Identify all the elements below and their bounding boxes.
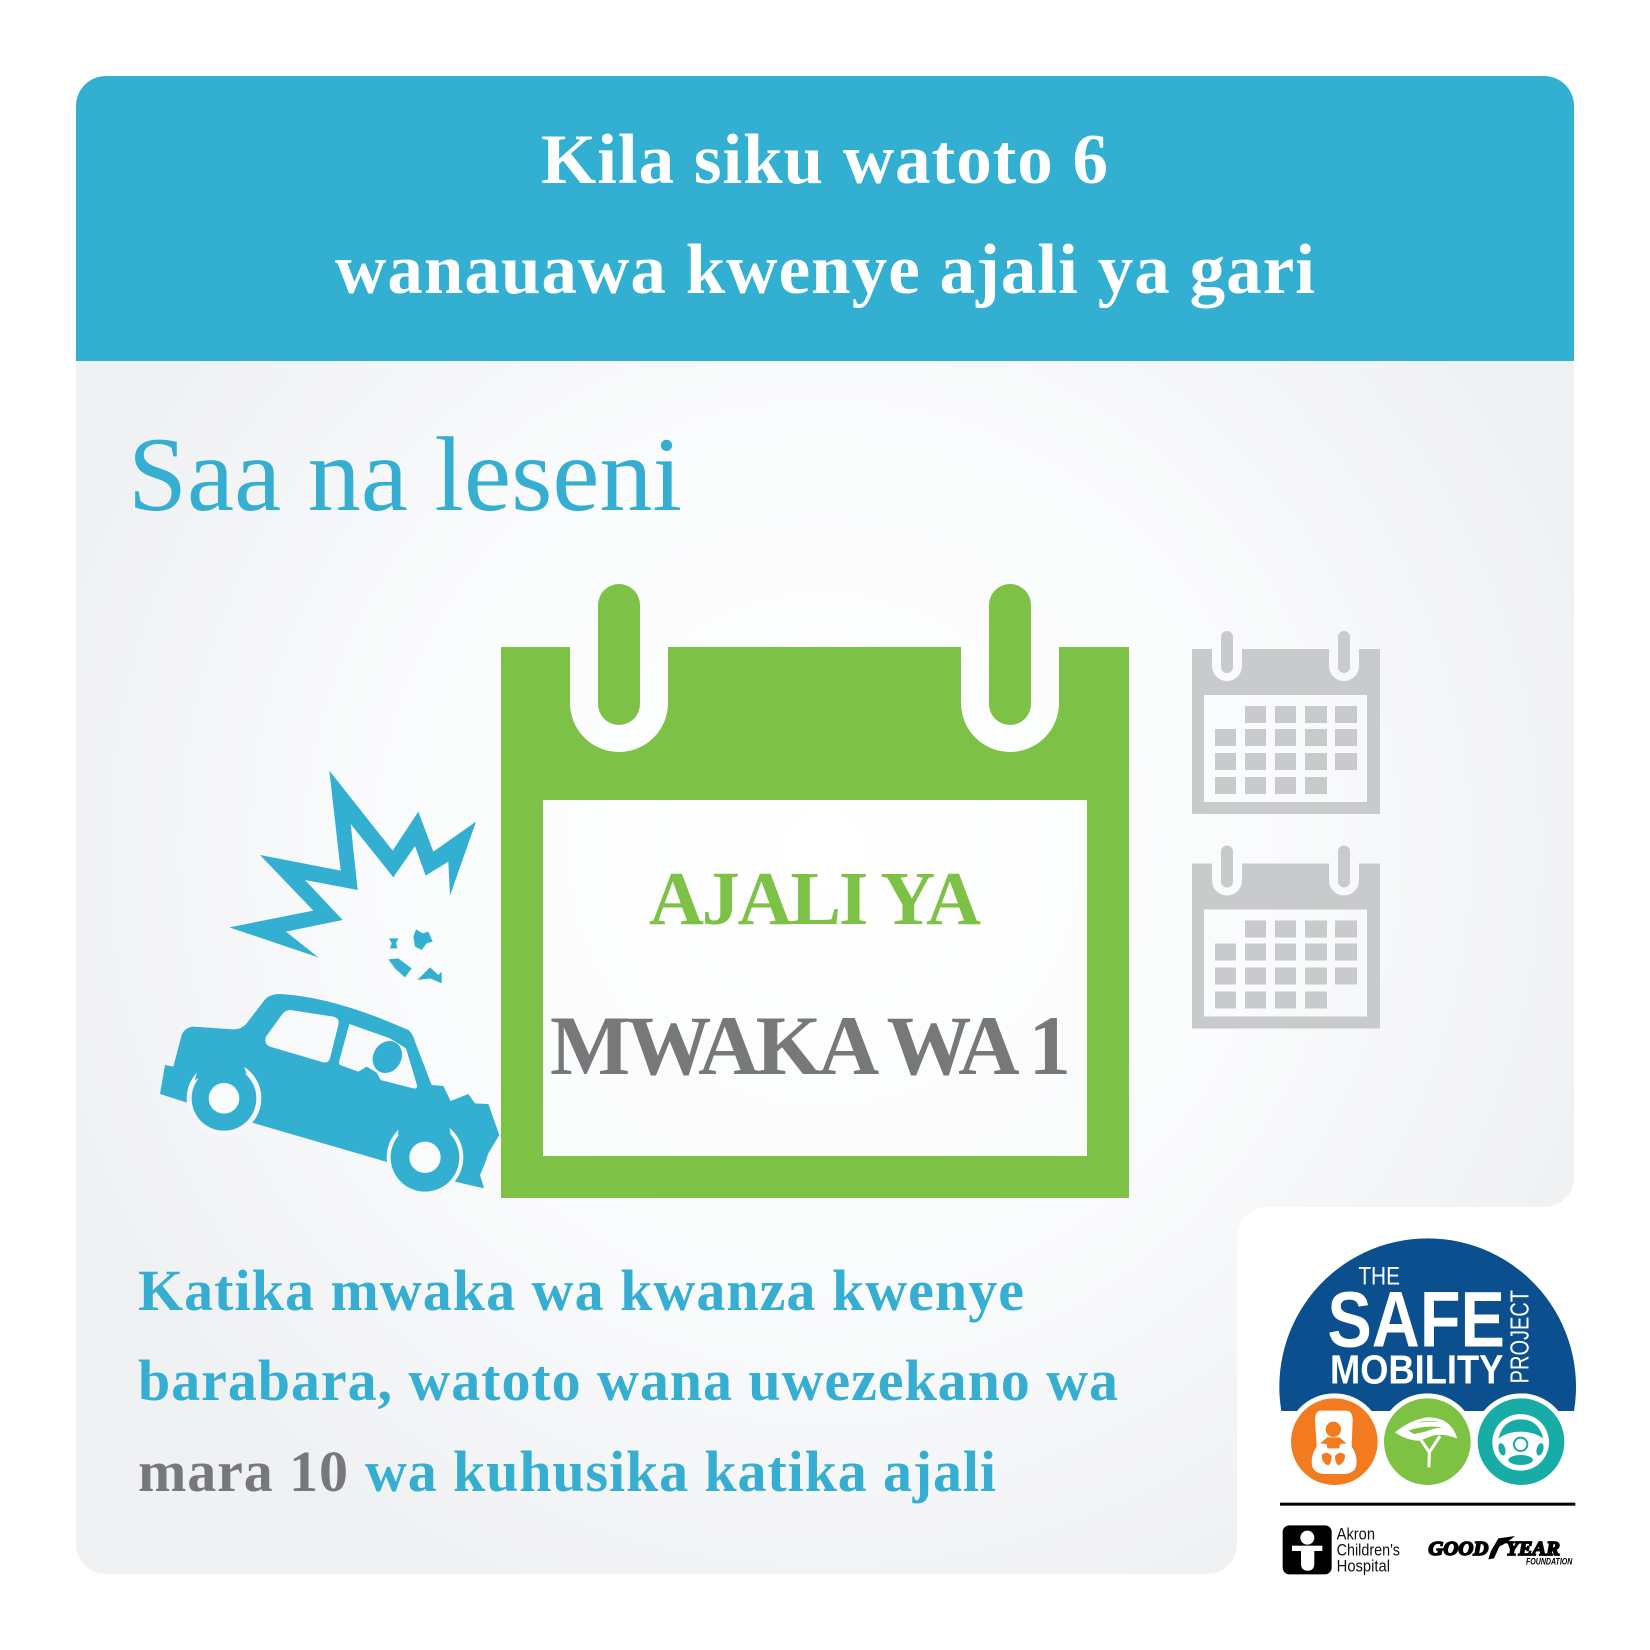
logo dome: SAFE (1327, 1276, 1505, 1364)
calendar text: MWAKA WA 1: MWAKA WA 1 (550, 999, 1071, 1093)
icon: small grey calendar top (1192, 631, 1380, 814)
icon: crashed car with impact burst (160, 771, 499, 1196)
panel: main card (76, 361, 1574, 1574)
text block: key message: Katika mwaka wa kwanza kwenye (138, 1258, 1024, 1323)
logo: Goodyear Foundation (1428, 1536, 1573, 1567)
icon: bicycle helmet (1379, 1393, 1476, 1490)
heading: Saa na leseni: Saa na leseni (128, 416, 682, 533)
logo dome (1279, 1238, 1576, 1411)
logo dome: PROJECT (1505, 1290, 1535, 1383)
logo: Goodyear Foundation: YEAR (1506, 1538, 1560, 1560)
logo: Akron Children's Hospital: Children's (1337, 1540, 1400, 1559)
calendar text: AJALI YA: AJALI YA (649, 857, 981, 941)
text block: key message: barabara, watoto wana uwezekano wa (138, 1348, 1118, 1413)
icon: impact burst (229, 771, 476, 957)
logo: Goodyear Foundation: GOOD (1428, 1538, 1488, 1560)
icon: small grey calendar bottom (1192, 846, 1380, 1028)
logo: Akron Children's Hospital (1283, 1524, 1400, 1576)
text block: key message (138, 1258, 1118, 1504)
logo: Akron Children's Hospital: Akron (1337, 1524, 1375, 1543)
text block: key message: wa kuhusika katika ajali (365, 1439, 996, 1504)
icon: large green calendar (501, 584, 1129, 1198)
text block: key message: mara 10 (138, 1439, 348, 1504)
logo dome: MOBILITY (1330, 1346, 1503, 1392)
icon: debris (388, 929, 442, 983)
title line 1: Kila siku watoto 6 (541, 121, 1108, 199)
logo: Goodyear Foundation: FOUNDATION (1526, 1557, 1573, 1567)
icon: steering wheel (1473, 1393, 1569, 1490)
panel: header banner (76, 76, 1574, 361)
logo dome: THE (1358, 1263, 1400, 1291)
icon: child seat (1286, 1393, 1383, 1490)
title line 2: wanauawa kwenye ajali ya gari (335, 231, 1315, 309)
logo: The Safe Mobility Project (1279, 1238, 1576, 1576)
logo: Akron Children's Hospital: Hospital (1337, 1557, 1390, 1576)
icon: car (160, 994, 499, 1196)
